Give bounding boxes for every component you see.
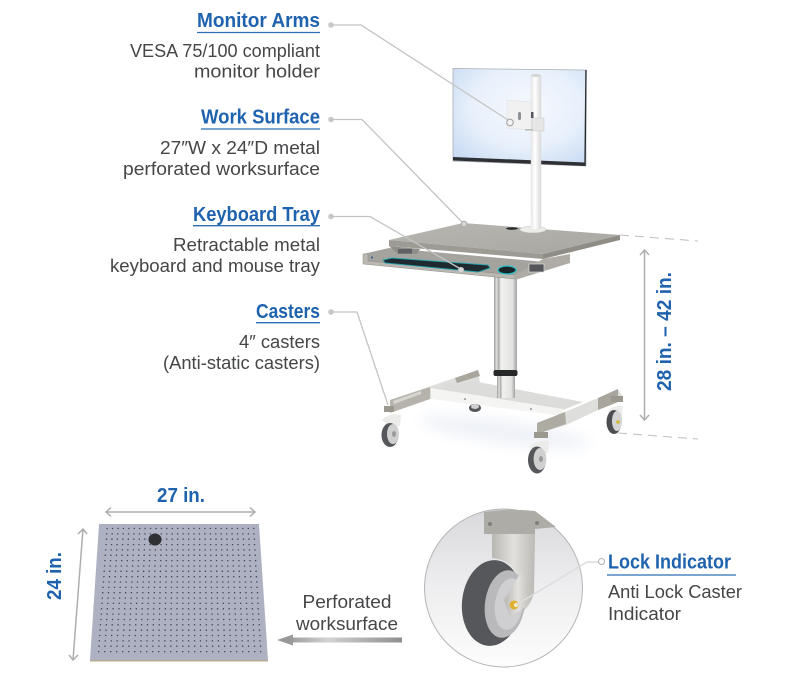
- leader: Work Surface: [328, 117, 467, 227]
- product illustration: mobile cart: [363, 68, 623, 474]
- width dimension: 27 in.: [106, 485, 255, 516]
- label: Keyboard Tray: [110, 204, 321, 276]
- keyboard tray: [363, 248, 545, 279]
- label: Lock Indicator: Lock Indicator: [608, 552, 731, 574]
- width dimension: 27 in.: 27 in.: [157, 485, 205, 507]
- label: Casters: [163, 301, 320, 373]
- perforated desk top: [389, 214, 620, 259]
- monitor pole: [531, 74, 541, 229]
- grommet hole: [148, 534, 162, 546]
- leader: Monitor Arms: [328, 22, 513, 126]
- caption: Perforated worksurface: [295, 591, 398, 634]
- wheel hub: [480, 568, 530, 640]
- label: Monitor Arms: Monitor Arms: [197, 10, 320, 32]
- rear caster: [469, 404, 481, 412]
- under-desk housing: [389, 246, 570, 280]
- label: Keyboard Tray: Keyboard Tray: [193, 204, 321, 226]
- floor shadow: [419, 409, 591, 455]
- label: Work Surface: Work Surface: [201, 106, 320, 128]
- caster fork: [492, 534, 535, 618]
- caption: Perforated worksurface: Perforated: [302, 591, 392, 612]
- left caster: [382, 406, 401, 447]
- label: Lock Indicator: Indicator: [608, 603, 681, 624]
- right caster: [606, 396, 623, 434]
- monitor: [453, 68, 586, 166]
- label: Monitor Arms: [130, 10, 320, 82]
- mount block: [484, 510, 556, 534]
- label: Monitor Arms: VESA 75/100 compliant: [130, 40, 320, 61]
- front caster: [528, 432, 549, 474]
- leader: Casters: [328, 309, 388, 405]
- right foot: [537, 389, 623, 434]
- label: Casters: (Anti-static casters): [163, 352, 320, 373]
- height column: [494, 268, 518, 398]
- label: Keyboard Tray: keyboard and mouse tray: [110, 255, 321, 276]
- arrow: pointing to plate: [277, 634, 402, 646]
- left foot: [390, 370, 480, 413]
- depth dimension: 24 in.: [44, 529, 87, 660]
- label: Casters: Casters: [256, 301, 320, 323]
- casters: [382, 396, 623, 474]
- label: Work Surface: 27″W x 24″D metal: [160, 137, 320, 158]
- VESA bracket: [507, 100, 544, 131]
- lock indicator: [510, 600, 518, 610]
- leader: Keyboard Tray: [328, 214, 464, 273]
- cart base: [390, 370, 623, 434]
- height dimension: 28 in. to 42 in.: 28 in. – 42 in.: [654, 272, 676, 391]
- perforation dots: [98, 528, 266, 652]
- leader: Lock Indicator: [516, 558, 604, 605]
- label: Work Surface: [123, 106, 320, 179]
- label: Casters: 4″ casters: [239, 331, 320, 352]
- caption: Perforated worksurface: worksurface: [295, 613, 398, 634]
- label: Monitor Arms: monitor holder: [194, 60, 320, 82]
- label: Lock Indicator: [607, 552, 742, 624]
- caster detail circle: [424, 509, 582, 667]
- label: Lock Indicator: Anti Lock Caster: [608, 581, 742, 602]
- tire: [458, 557, 526, 649]
- height dimension: 28 in. to 42 in.: [618, 235, 698, 439]
- cross beam: [431, 382, 583, 410]
- keyboard: [383, 258, 490, 272]
- depth dimension: 24 in.: 24 in.: [44, 552, 66, 600]
- label: Work Surface: perforated worksurface: [123, 158, 320, 179]
- label: Keyboard Tray: Retractable metal: [173, 234, 320, 255]
- mouse: [498, 266, 516, 274]
- perforated worksurface plate: [90, 524, 268, 662]
